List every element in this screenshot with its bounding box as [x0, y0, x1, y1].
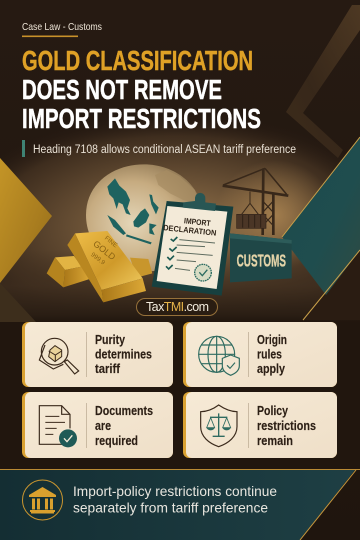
text: required — [95, 433, 138, 448]
footer text: separately from tariff preference — [73, 500, 268, 516]
text: apply — [257, 361, 286, 376]
text — [95, 332, 152, 376]
decorative outline chevron — [286, 5, 360, 158]
subtitle accent bar — [22, 140, 25, 157]
title: IMPORT RESTRICTIONS — [22, 103, 261, 134]
footer text — [73, 483, 277, 516]
footer panel — [0, 470, 360, 540]
card: origin rules apply — [183, 322, 337, 387]
title: DOES NOT REMOVE — [22, 74, 222, 105]
icon: customs container — [230, 233, 292, 282]
text: tariff — [95, 361, 121, 376]
text: Origin — [257, 332, 287, 347]
eyebrow underline — [22, 36, 78, 37]
hero illustration — [47, 164, 292, 302]
text — [95, 403, 153, 448]
title — [22, 45, 261, 134]
icon: clipboard import declaration — [152, 193, 233, 296]
icon: magnifier over gold — [39, 338, 79, 374]
icon: institution — [22, 480, 62, 520]
icon: front gold bar: FINE — [103, 235, 119, 249]
text — [257, 403, 316, 448]
title: GOLD CLASSIFICATION — [22, 45, 253, 76]
text: restrictions — [257, 418, 316, 433]
text: remain — [257, 433, 293, 448]
text: Purity — [95, 332, 126, 347]
card: policy restrictions remain — [183, 392, 337, 458]
text: are — [95, 418, 111, 433]
card: purity determines tariff — [22, 322, 173, 387]
text: Documents — [95, 403, 153, 418]
icon: globe with shield — [199, 336, 239, 375]
icon: front gold bar: 999.9 — [89, 251, 106, 267]
subtitle: Heading 7108 allows conditional ASEAN tariff preference — [33, 144, 296, 156]
card: documents are required — [22, 392, 173, 458]
icon: document with check — [39, 406, 77, 447]
watermark pill: TaxTMI.com — [146, 300, 209, 314]
eyebrow: case law: Case Law - Customs — [22, 21, 102, 33]
icon: front gold bar: GOLD — [91, 239, 118, 262]
icon: front gold bar — [67, 231, 146, 302]
icon: clipboard import declaration: IMPORT — [184, 216, 211, 228]
icon: customs container: CUSTOMS — [237, 251, 286, 271]
text: Policy — [257, 403, 289, 418]
text — [257, 332, 287, 376]
text: rules — [257, 346, 282, 362]
icon: clipboard import declaration: DECLARATION — [163, 223, 217, 238]
icon: crane — [223, 168, 288, 235]
icon: shield with scales — [201, 405, 237, 447]
watermark pill — [136, 298, 218, 316]
teal diamond right — [282, 137, 360, 320]
speckled gold corner — [0, 283, 36, 322]
icon: globe with ASEAN map — [86, 164, 203, 272]
text: determines — [95, 346, 152, 362]
footer text: Import-policy restrictions continue — [73, 483, 277, 499]
icon: back gold bar — [47, 256, 152, 287]
gold diamond left — [0, 158, 52, 283]
